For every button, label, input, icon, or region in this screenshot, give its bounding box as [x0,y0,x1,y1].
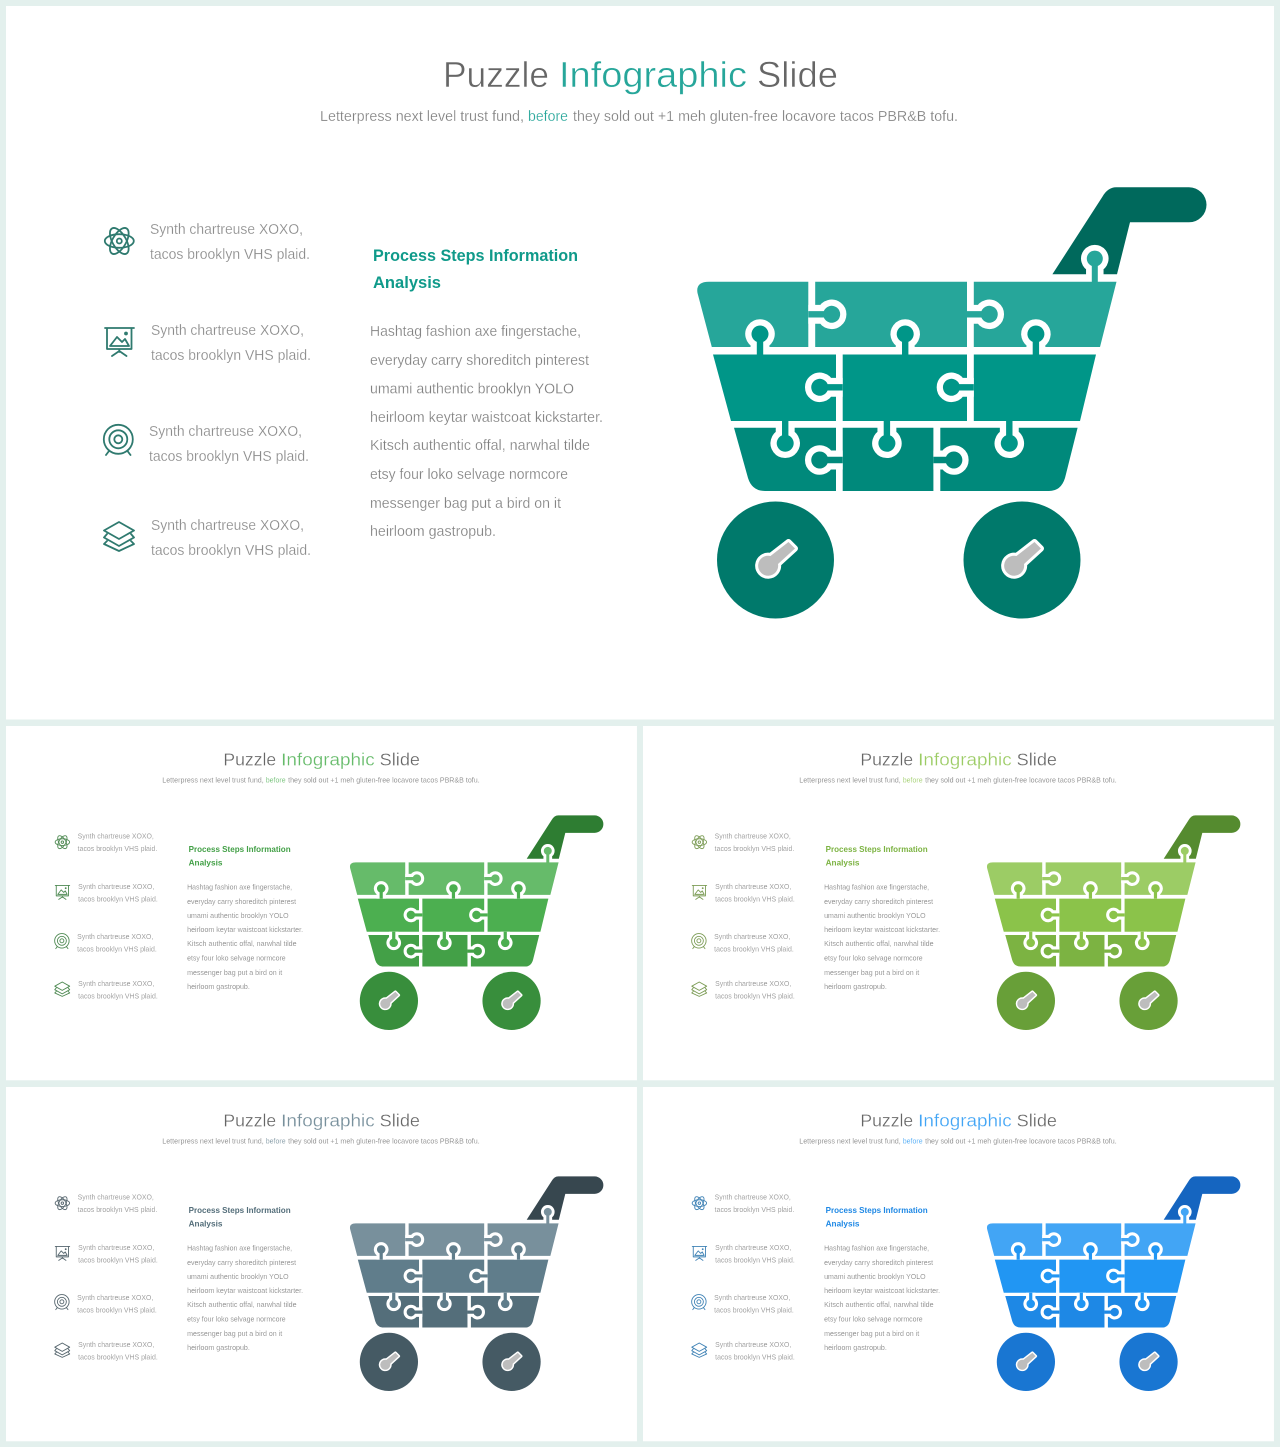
body paragraph: heirloom gastropub. [824,1343,887,1352]
title [223,750,420,770]
list item 4 text: tacos brooklyn VHS plaid. [151,543,311,559]
feature list: tacos brooklyn VHS plaid. [715,991,795,1000]
subtitle [799,1136,1117,1145]
body paragraph: Hashtag fashion axe fingerstache, [187,1243,292,1252]
left wheel [717,502,834,618]
subtitle: Letterpress next level trust fund, [320,109,524,125]
body paragraph: Kitsch authentic offal, narwhal tilde [824,1300,934,1309]
body paragraph: everyday carry shoreditch pinterest [187,1258,297,1267]
heading: process steps: Process Steps Information [826,1205,928,1215]
title: Puzzle [443,54,549,95]
body paragraph: etsy four loko selvage normcore [824,954,923,963]
feature list: tacos brooklyn VHS plaid. [78,1205,157,1214]
body paragraph: Hashtag fashion axe fingerstache, [824,1243,929,1252]
feature list: Synth chartreuse XOXO, [78,1243,154,1252]
title: Infographic [281,1111,375,1131]
feature list: tacos brooklyn VHS plaid. [715,1352,795,1361]
body paragraph [187,1243,303,1352]
feature list: tacos brooklyn VHS plaid. [78,894,158,903]
list item 3 text: Synth chartreuse XOXO, [149,424,302,440]
body paragraph: heirloom keytar waistcoat kickstarter. [824,1286,940,1295]
feature list [692,832,795,1000]
puzzle shopping cart [987,815,1240,1030]
feature list: tacos brooklyn VHS plaid. [715,894,795,903]
right wheel [964,502,1080,618]
title: Slide [1017,1111,1057,1131]
body paragraph: etsy four loko selvage normcore [824,1315,923,1324]
feature list: Synth chartreuse XOXO, [78,1193,154,1202]
feature list: Synth chartreuse XOXO, [77,932,153,941]
body paragraph: everyday carry shoreditch pinterest [824,897,934,906]
body paragraph: heirloom keytar waistcoat kickstarter. [824,925,940,934]
list item 2 text: Synth chartreuse XOXO, [151,323,304,339]
list item 2 text: tacos brooklyn VHS plaid. [151,348,311,364]
heading: process steps [826,1205,928,1229]
subtitle: they sold out +1 meh gluten-free locavore tacos PBR&B tofu. [925,1136,1117,1145]
list item 1 text: tacos brooklyn VHS plaid. [150,247,310,263]
heading: process steps: Analysis [826,858,860,868]
list item 1 text: Synth chartreuse XOXO, [150,222,303,238]
row 1 side tabs [808,306,998,323]
feature list: Synth chartreuse XOXO, [715,979,791,988]
heading: process steps: Analysis [826,1219,860,1229]
heading: process steps [373,246,578,292]
heading: process steps [189,844,291,868]
cart row 2 pieces [713,354,1096,421]
heading: process steps: Analysis [373,273,441,292]
body paragraph [370,323,603,540]
subtitle: before [528,109,568,125]
heading: process steps: Process Steps Information [189,844,291,854]
body paragraph: etsy four loko selvage normcore [187,954,286,963]
feature list: tacos brooklyn VHS plaid. [715,1255,795,1264]
feature list: tacos brooklyn VHS plaid. [77,1306,157,1315]
feature list: Synth chartreuse XOXO, [714,932,790,941]
body paragraph: heirloom keytar waistcoat kickstarter. [187,1286,303,1295]
body paragraph: umami authentic brooklyn YOLO [370,380,574,398]
list item 4 text: Synth chartreuse XOXO, [151,518,304,534]
feature list: tacos brooklyn VHS plaid. [77,945,157,954]
subtitle: before [266,1136,286,1145]
feature list: Synth chartreuse XOXO, [78,832,154,841]
title [860,1111,1057,1131]
subtitle: before [266,775,286,784]
feature list: Synth chartreuse XOXO, [715,1340,791,1349]
feature list: tacos brooklyn VHS plaid. [78,844,157,853]
title: Puzzle [860,1111,913,1131]
feature list: tacos brooklyn VHS plaid. [78,1255,158,1264]
body paragraph: everyday carry shoreditch pinterest [824,1258,934,1267]
feature list: Synth chartreuse XOXO, [715,832,791,841]
body paragraph: Hashtag fashion axe fingerstache, [370,323,581,340]
feature list: tacos brooklyn VHS plaid. [78,1352,158,1361]
title: Infographic [918,1111,1012,1131]
body paragraph [824,882,940,991]
feature list: Synth chartreuse XOXO, [78,1340,154,1349]
icon: layers [104,522,134,551]
feature list: Synth chartreuse XOXO, [715,1193,791,1202]
row 2 upward tabs [752,326,1044,354]
list item 1 text [150,222,310,263]
body paragraph: Kitsch authentic offal, narwhal tilde [370,437,590,454]
handle puzzle tab [1087,251,1103,282]
panel: main teal slide [6,6,1274,720]
list item 3 text: tacos brooklyn VHS plaid. [149,449,309,465]
title: Puzzle [223,1111,276,1131]
panel: green slide [6,726,637,1080]
subtitle [799,775,1117,784]
puzzle shopping cart [697,187,1206,619]
title: Puzzle [860,750,913,770]
cart handle [1052,187,1206,274]
feature list [692,1193,795,1361]
title: Puzzle [223,750,276,770]
subtitle [320,109,958,125]
body paragraph: heirloom gastropub. [187,1343,250,1352]
body paragraph: heirloom keytar waistcoat kickstarter. [370,409,603,426]
body paragraph [824,1243,940,1352]
title: Slide [380,1111,420,1131]
body paragraph: everyday carry shoreditch pinterest [370,352,590,369]
heading: process steps: Analysis [189,1219,223,1229]
subtitle: they sold out +1 meh gluten-free locavore tacos PBR&B tofu. [288,775,480,784]
title: Infographic [918,750,1012,770]
body paragraph: messenger bag put a bird on it [187,968,283,977]
subtitle: Letterpress next level trust fund, [162,775,264,784]
feature list: Synth chartreuse XOXO, [78,882,154,891]
title [223,1111,420,1131]
body paragraph: umami authentic brooklyn YOLO [187,1272,289,1281]
subtitle: Letterpress next level trust fund, [799,775,901,784]
body paragraph: messenger bag put a bird on it [187,1329,283,1338]
body paragraph: umami authentic brooklyn YOLO [187,911,289,920]
body paragraph: heirloom keytar waistcoat kickstarter. [187,925,303,934]
puzzle shopping cart [987,1176,1240,1391]
title: Slide [1017,750,1057,770]
subtitle: they sold out +1 meh gluten-free locavore tacos PBR&B tofu. [573,109,958,125]
body paragraph: messenger bag put a bird on it [824,1329,920,1338]
subtitle: Letterpress next level trust fund, [799,1136,901,1145]
feature list: tacos brooklyn VHS plaid. [714,945,794,954]
body paragraph: Hashtag fashion axe fingerstache, [187,882,292,891]
body paragraph [187,882,303,991]
body paragraph: Kitsch authentic offal, narwhal tilde [187,939,297,948]
body paragraph: heirloom gastropub. [370,523,496,540]
title: Infographic [559,54,747,95]
title [443,54,838,95]
feature list: tacos brooklyn VHS plaid. [714,1306,794,1315]
body paragraph: everyday carry shoreditch pinterest [187,897,297,906]
puzzle shopping cart [350,815,603,1030]
subtitle: before [903,1136,923,1145]
feature list [55,1193,158,1361]
icon: target [104,425,133,455]
feature list: tacos brooklyn VHS plaid. [78,991,158,1000]
title: Slide [757,54,838,95]
feature list: Synth chartreuse XOXO, [78,979,154,988]
panel: blue slide [643,1087,1274,1441]
title: Slide [380,750,420,770]
heading: process steps [189,1205,291,1229]
panel: blue grey slide [6,1087,637,1441]
heading: process steps: Analysis [189,858,223,868]
row 3 side tabs [811,452,962,468]
body paragraph: umami authentic brooklyn YOLO [824,911,926,920]
feature list: Synth chartreuse XOXO, [715,1243,791,1252]
body paragraph: Kitsch authentic offal, narwhal tilde [824,939,934,948]
row 2 side tabs [811,379,974,396]
list item 2 text [151,323,311,364]
row 3 downward tabs [777,421,1018,452]
subtitle: Letterpress next level trust fund, [162,1136,264,1145]
body paragraph: heirloom gastropub. [824,982,887,991]
subtitle: they sold out +1 meh gluten-free locavore tacos PBR&B tofu. [925,775,1117,784]
icon: presentation board [105,328,134,356]
subtitle: they sold out +1 meh gluten-free locavore tacos PBR&B tofu. [288,1136,480,1145]
heading: process steps: Process Steps Information [189,1205,291,1215]
puzzle shopping cart [350,1176,603,1391]
body paragraph: etsy four loko selvage normcore [370,466,568,483]
title: Infographic [281,750,375,770]
feature list [55,832,158,1000]
feature list: tacos brooklyn VHS plaid. [715,844,794,853]
body paragraph: Kitsch authentic offal, narwhal tilde [187,1300,297,1309]
panel: light green slide [643,726,1274,1080]
title [860,750,1057,770]
feature list: tacos brooklyn VHS plaid. [715,1205,794,1214]
heading: process steps [826,844,928,868]
body paragraph: messenger bag put a bird on it [824,968,920,977]
subtitle [162,775,480,784]
heading: process steps: Process Steps Information [826,844,928,854]
heading: process steps: Process Steps Information [373,246,578,265]
icon: atom [105,225,134,257]
subtitle [162,1136,480,1145]
body paragraph: messenger bag put a bird on it [370,495,562,512]
body paragraph: Hashtag fashion axe fingerstache, [824,882,929,891]
feature list: Synth chartreuse XOXO, [714,1293,790,1302]
cart row 3 pieces [734,428,1078,491]
feature list: Synth chartreuse XOXO, [77,1293,153,1302]
body paragraph: etsy four loko selvage normcore [187,1315,286,1324]
body paragraph: heirloom gastropub. [187,982,250,991]
cart row 1 pieces [697,282,1116,347]
list item 3 text [149,424,309,465]
subtitle: before [903,775,923,784]
body paragraph: umami authentic brooklyn YOLO [824,1272,926,1281]
feature list: Synth chartreuse XOXO, [715,882,791,891]
list item 4 text [151,518,311,559]
